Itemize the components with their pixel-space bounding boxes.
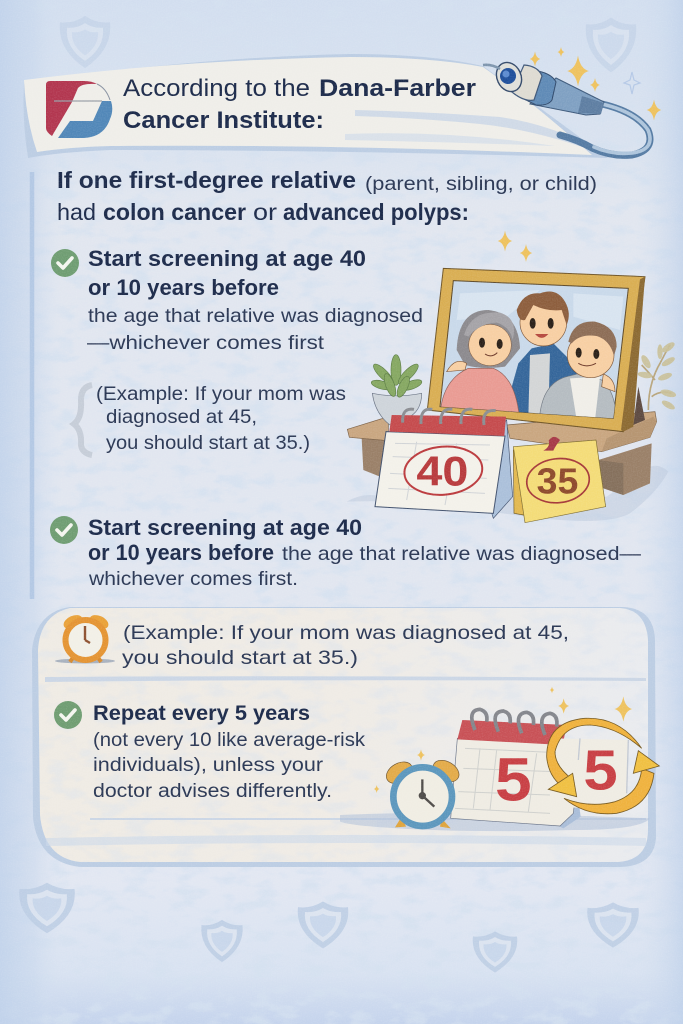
illustration: family photo, desk, calendars [347,268,677,523]
man in blue [506,292,577,416]
intro text: If one first-degree relative [57,167,356,193]
intro text: (parent, sibling, or child) [365,174,597,195]
illustration: clock, calendar, repeat arrows [340,687,659,831]
example text: (Example: If your mom was diagnosed at 45, [123,622,569,644]
heading text: Cancer Institute: [123,107,324,134]
repeat text: (not every 10 like average-risk [93,730,366,751]
bullet text: Start screening at age 40 [88,246,366,271]
repeat text: Repeat every 5 years [93,701,310,725]
watermark: top shields [60,16,636,73]
shadow [340,813,650,831]
intro text [57,167,597,225]
intro text: or [253,199,277,225]
intro text: had [57,199,96,225]
icon: check [54,701,82,729]
repeat text: doctor advises differently. [93,781,332,802]
bullet text [88,515,642,590]
heading text: According to the [123,75,310,102]
branch [637,340,677,411]
bullet: second screening rule [50,515,642,590]
calendar 5: 5 [583,739,618,802]
picture stand [633,387,645,425]
icon: check [51,249,79,277]
bullet: first screening rule [51,246,423,354]
example text: you should start at 35.) [106,433,310,454]
example text: you should start at 35.) [122,647,358,669]
man in grey [539,322,617,420]
example note with brace [74,384,346,455]
intro text: colon cancer [103,199,246,225]
bullet text: or 10 years before [88,275,279,300]
calendar 5: 5 [495,745,532,814]
intro text: advanced polyps: [283,199,469,225]
repeat text [93,701,366,802]
example text: diagnosed at 45, [106,407,257,428]
desk [347,412,657,495]
bullet text: the age that relative was diagnosed— [282,543,642,565]
panel: example and repeat interval [32,607,660,867]
icon: blue alarm clock [383,756,463,828]
bullet text: Start screening at age 40 [88,515,362,540]
plant [370,355,423,425]
example text [96,384,346,454]
sticky note 35: 35 [537,460,578,501]
bullet text: whichever comes first. [88,568,298,590]
grandmother [440,310,520,417]
sparkles [374,687,632,793]
frame [427,268,645,432]
repeat text: individuals), unless your [93,755,324,776]
brace [74,385,92,455]
icon: orange alarm clock [55,612,115,664]
calendar 40 [375,409,513,518]
repeat arrows [547,718,659,814]
example text [122,622,569,669]
bullet text: —whichever comes first [87,332,325,354]
calendar 5 [451,709,628,828]
heading text: Dana-Farber [319,75,476,102]
bullet text: or 10 years before [88,540,274,565]
family portrait [440,290,623,420]
logo: Dana-Farber [46,81,112,138]
header banner [24,54,610,158]
shadow [347,466,668,521]
bullet text: the age that relative was diagnosed [88,305,423,327]
banner shape [24,54,610,158]
panel background [32,607,656,867]
calendar 40: 40 [416,447,468,494]
sparkles: colonoscope [530,47,661,120]
icon: check [50,516,78,544]
watermark: bottom shields [19,883,639,973]
bullet text [87,246,423,354]
icon: colonoscope [483,58,650,155]
content rule [30,172,34,599]
sticky note 35 [513,437,606,523]
heading text [123,75,476,134]
sparkles: above frame [498,230,532,262]
example text: (Example: If your mom was [96,384,346,405]
